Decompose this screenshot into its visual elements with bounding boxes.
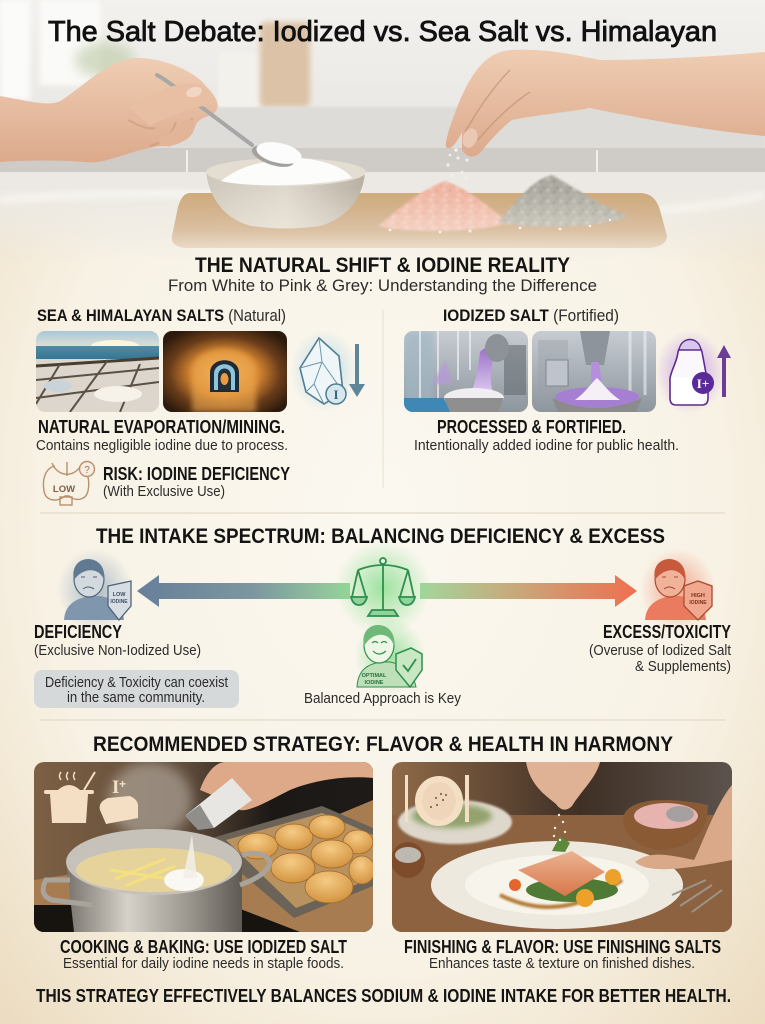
balanced approach label: Balanced Approach is Key (304, 690, 461, 707)
icon: pot and bread with I+: + (119, 777, 126, 791)
heading: recommended strategy: RECOMMENDED STRATEGY: FLAVOR & HEALTH IN HARMONY (93, 733, 673, 756)
photo: salt mine tunnel (163, 331, 287, 412)
photo: salmon plate and finishing salt (391, 762, 732, 932)
excess note (589, 642, 732, 675)
serving plate (431, 841, 683, 929)
spoon (157, 75, 304, 171)
cutting board (172, 193, 667, 248)
icon: smiling person with optimal iodine: IODINE (365, 680, 384, 686)
subheading: From White to Pink & Grey: Understanding the Difference (168, 277, 597, 295)
icon: low thyroid: ? (84, 465, 90, 476)
iodized salt heading: IODIZED SALT (Fortified) (443, 306, 619, 325)
deficiency note: (Exclusive Non-Iodized Use) (34, 642, 201, 659)
processed note: Intentionally added iodine for public health. (414, 437, 679, 454)
natural salts heading: SEA & HIMALAYAN SALTS (Natural) (37, 306, 286, 325)
natural evaporation label: NATURAL EVAPORATION/MINING. (38, 417, 285, 437)
callout: coexistence note: Deficiency & Toxicity can coexist (45, 675, 228, 691)
grey sea salt pile (498, 175, 628, 227)
icon: smiling person with optimal iodine: OPTIMAL (362, 673, 387, 679)
processed label: PROCESSED & FORTIFIED. (437, 417, 626, 437)
icon: low thyroid (43, 462, 94, 505)
cooking note: Essential for daily iodine needs in staple foods. (63, 956, 344, 972)
left hand (0, 58, 218, 162)
photo: pasta pot and rolls (34, 762, 375, 932)
pink Himalayan salt pile (378, 181, 508, 231)
icon: person with high iodine (640, 548, 716, 632)
risk note: (With Exclusive Use) (103, 483, 225, 500)
photo: sea salt pans (36, 331, 159, 412)
icon: pot and bread with I+ (44, 772, 138, 824)
panel: natural salts (36, 306, 365, 505)
cooking label: COOKING & BAKING: USE IODIZED SALT (60, 937, 347, 957)
panel: iodized salt (404, 306, 731, 454)
salmon fillet (518, 851, 605, 896)
deficiency label: DEFICIENCY (34, 622, 122, 642)
icon: low thyroid: LOW (53, 484, 75, 495)
excess label: EXCESS/TOXICITY (603, 622, 731, 642)
callout: coexistence note: in the same community. (67, 690, 205, 706)
icon: crystal with low iodine (290, 329, 358, 413)
steel pot (66, 860, 242, 932)
icon: iodized salt shaker (655, 330, 725, 414)
icon: person with high iodine: IODINE (689, 600, 707, 606)
panel: intake spectrum (34, 540, 732, 708)
icon: iodized salt shaker: I+ (697, 376, 709, 391)
icon: person with low iodine: LOW (113, 592, 126, 598)
arrow: toward excess (420, 575, 637, 607)
left hand thumb and fingers (128, 84, 210, 146)
icon: plate with cutlery (405, 775, 469, 826)
photo: iodine being poured at factory (404, 331, 528, 412)
right hand (446, 50, 765, 157)
risk label: RISK: IODINE DEFICIENCY (103, 464, 290, 484)
baking tray (212, 806, 373, 918)
hand holding bowl (635, 785, 732, 869)
arrow: toward deficiency (137, 575, 350, 607)
icon: person with low iodine: IODINE (110, 599, 128, 605)
icon: crystal with low iodine: I (333, 387, 339, 402)
icon: balance scale (335, 540, 431, 636)
falling salt grains (389, 148, 611, 233)
title: The Salt Debate: Iodized vs. Sea Salt vs. Himalayan (48, 16, 717, 48)
hand with shaker (200, 762, 373, 810)
hero photo: hands salting over a cutting board (0, 0, 765, 262)
panel: cooking and baking (34, 762, 375, 972)
icon: person with low iodine (57, 548, 133, 632)
icon: person with high iodine: HIGH (691, 593, 705, 599)
arrow: iodine down (349, 344, 365, 397)
panel: finishing and flavor (391, 762, 732, 972)
hand sprinkling (526, 762, 600, 810)
heading: natural shift: THE NATURAL SHIFT & IODINE REALITY (195, 254, 570, 277)
natural evaporation note: Contains negligible iodine due to process. (36, 437, 288, 454)
bowl of white salt (206, 158, 366, 228)
excess note: (Overuse of Iodized Salt (589, 642, 732, 659)
heading: intake spectrum: THE INTAKE SPECTRUM: BALANCING DEFICIENCY & EXCESS (96, 525, 665, 548)
callout: coexistence note (34, 670, 239, 708)
finishing note: Enhances taste & texture on finished dishes. (429, 956, 695, 972)
wooden bowl of salt (623, 800, 708, 850)
excess note: & Supplements) (635, 658, 731, 675)
icon: smiling person with optimal iodine (354, 618, 426, 694)
arrow: iodine up (717, 345, 731, 397)
icon: pot and bread with I+: I (112, 777, 119, 798)
photo: iodine dosing funnel (532, 331, 656, 412)
